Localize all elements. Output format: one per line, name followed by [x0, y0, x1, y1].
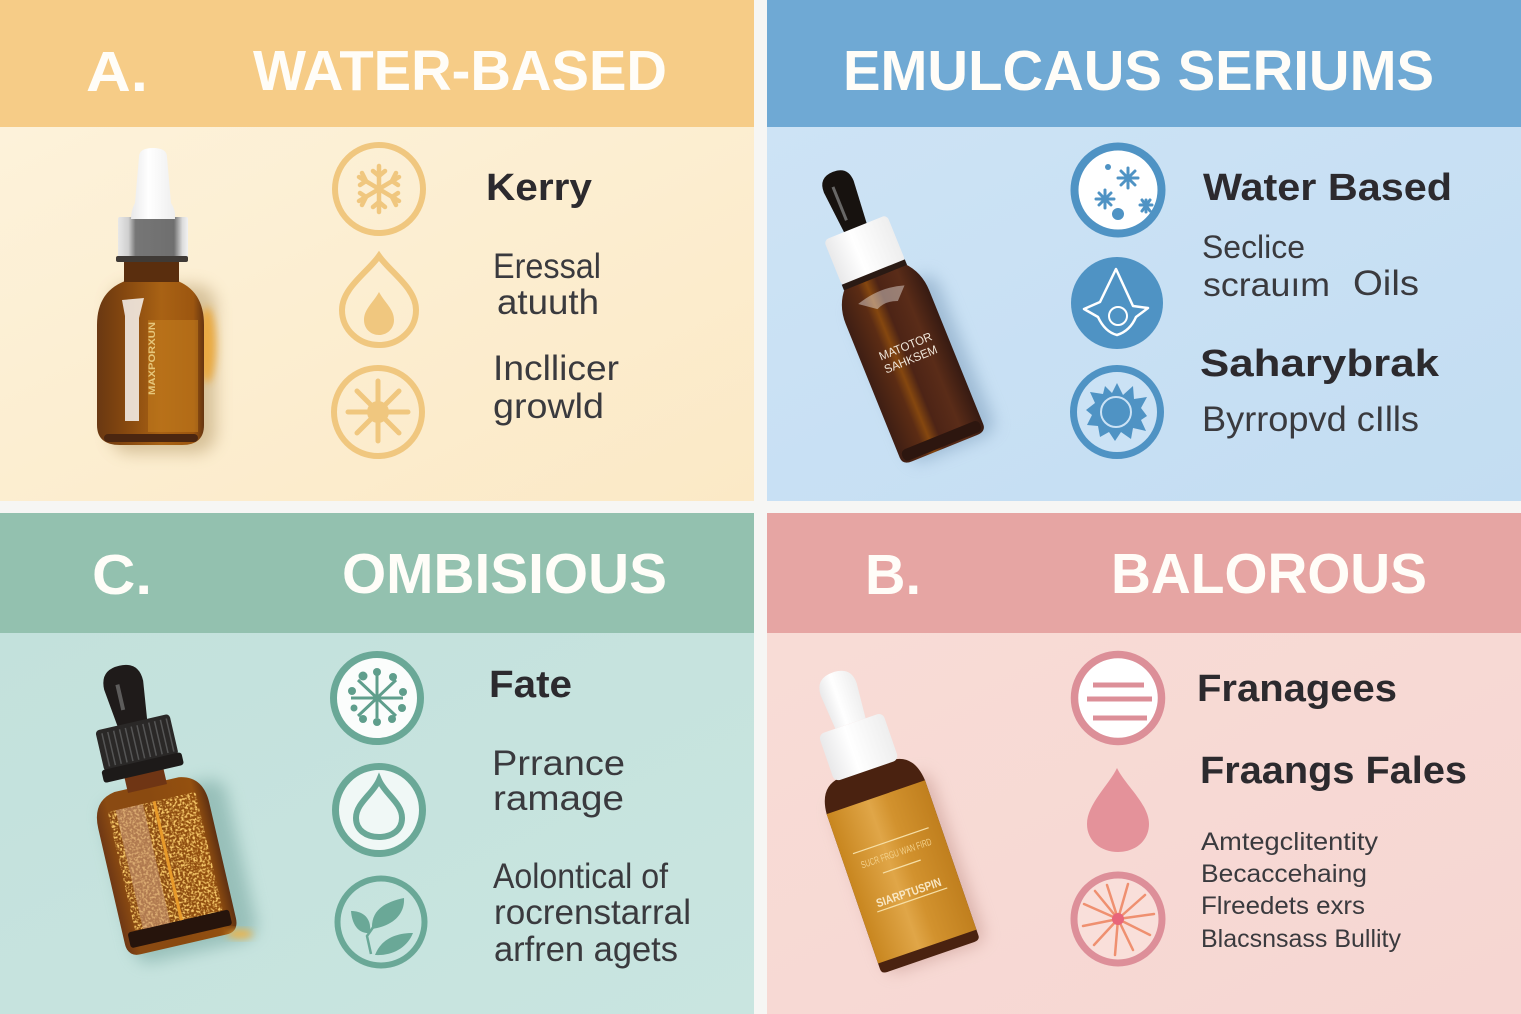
text block: Incllicer growld: Incllicer [493, 349, 619, 388]
bottle: amber with black ribbed cap [64, 649, 260, 967]
label: Fate: Fate [489, 664, 572, 706]
icon: leaves [338, 878, 424, 966]
panel: A water-based [0, 0, 754, 501]
label: Fraangs Fales: Fraangs Fales [1200, 750, 1467, 792]
heading: balorous: BALOROUS [1111, 542, 1427, 606]
icon: sun [1074, 368, 1160, 456]
icon: flower burst [334, 654, 420, 742]
icon: solid drop [1087, 768, 1149, 852]
text block: small list: Amtegclitentity [1201, 828, 1379, 856]
bottle: brown with white cap [791, 151, 998, 469]
text block: Aolontical of: arfren agets [494, 930, 678, 969]
bottle: brown with white cap: SAHKSEM [882, 342, 939, 376]
panel: C ombisious [0, 513, 754, 1014]
text block: Prrance ramage [492, 744, 625, 818]
panel D header band [767, 513, 1521, 633]
heading: emulcaus seriums: EMULCAUS SERIUMS [843, 39, 1434, 103]
panel B header band [767, 0, 1521, 127]
panel D background [767, 633, 1521, 1014]
icon: outlined drop [336, 766, 422, 854]
label: Franagees: Franagees [1197, 668, 1397, 710]
panel A header band [0, 0, 754, 127]
text block: Eressal atuuth: Eressal [493, 247, 601, 286]
icon: three lines [1074, 654, 1162, 742]
heading letter A: A. [86, 40, 148, 104]
heading letter C: C. [92, 543, 152, 607]
text block: Prrance ramage: Prrance [492, 744, 625, 783]
bottle: golden serum with white dropper [784, 654, 987, 977]
label: Water Based: Water Based [1203, 167, 1452, 209]
text block: Incllicer growld: growld [493, 387, 604, 426]
panel C background [0, 633, 754, 1014]
panel C header band [0, 513, 754, 633]
bottle: brown with white cap: MATOTOR [877, 329, 934, 363]
panel: emulcaus seriums [767, 0, 1521, 501]
icon: snowflake [335, 145, 423, 233]
icon: microbes [1074, 146, 1162, 234]
bottle: golden serum with white dropper: SIARPTUSPIN [874, 875, 943, 910]
label: Kerry: Kerry [486, 167, 592, 209]
text block: Byrropvd cIlls: Byrropvd cIlls [1202, 400, 1419, 439]
text block: small list: Blacsnsass Bullity [1201, 925, 1401, 953]
bottle: amber with silver collar [97, 148, 216, 453]
panel A background [0, 127, 754, 501]
label: Saharybrak: Saharybrak [1200, 343, 1440, 385]
heading: ombisious: OMBISIOUS [342, 542, 667, 606]
text block: Aolontical of [493, 857, 691, 969]
text block: Seclice scrauim Oils: Seclice [1202, 229, 1305, 265]
text block: Seclice scrauim Oils: Oils [1353, 264, 1419, 303]
icon: water drop [342, 256, 416, 345]
text block: Aolontical of: Aolontical of [493, 857, 668, 896]
bottle: golden serum with white dropper: SUCR FRGU WAN FIRD [860, 837, 933, 871]
heading: water-based: WATER-BASED [253, 39, 667, 103]
text block: small list: Flreedets exrs [1201, 892, 1365, 920]
text block: Eressal atuuth: atuuth [497, 283, 599, 322]
text block: Aolontical of: rocrenstarral [494, 893, 691, 932]
icon: droplet with cell [1071, 257, 1163, 349]
glint under bottle [227, 930, 253, 938]
heading letter B: B. [865, 543, 921, 607]
text block: Seclice scrauim Oils [1202, 229, 1419, 303]
icon: sun burst [334, 368, 422, 456]
text block: small list: Becaccehaing [1201, 860, 1367, 888]
text block: small list [1201, 828, 1401, 953]
icon: radial strands [1074, 875, 1162, 963]
text block: Eressal atuuth [493, 247, 601, 322]
text block: Incllicer growld [493, 349, 619, 426]
panel B background [767, 127, 1521, 501]
text block: Seclice scrauim Oils: scrauım [1203, 266, 1330, 303]
panel: B balorous [767, 513, 1521, 1014]
bottle: amber with silver collar: MAXPORXUN [147, 322, 157, 395]
text block: Prrance ramage: ramage [493, 779, 624, 818]
